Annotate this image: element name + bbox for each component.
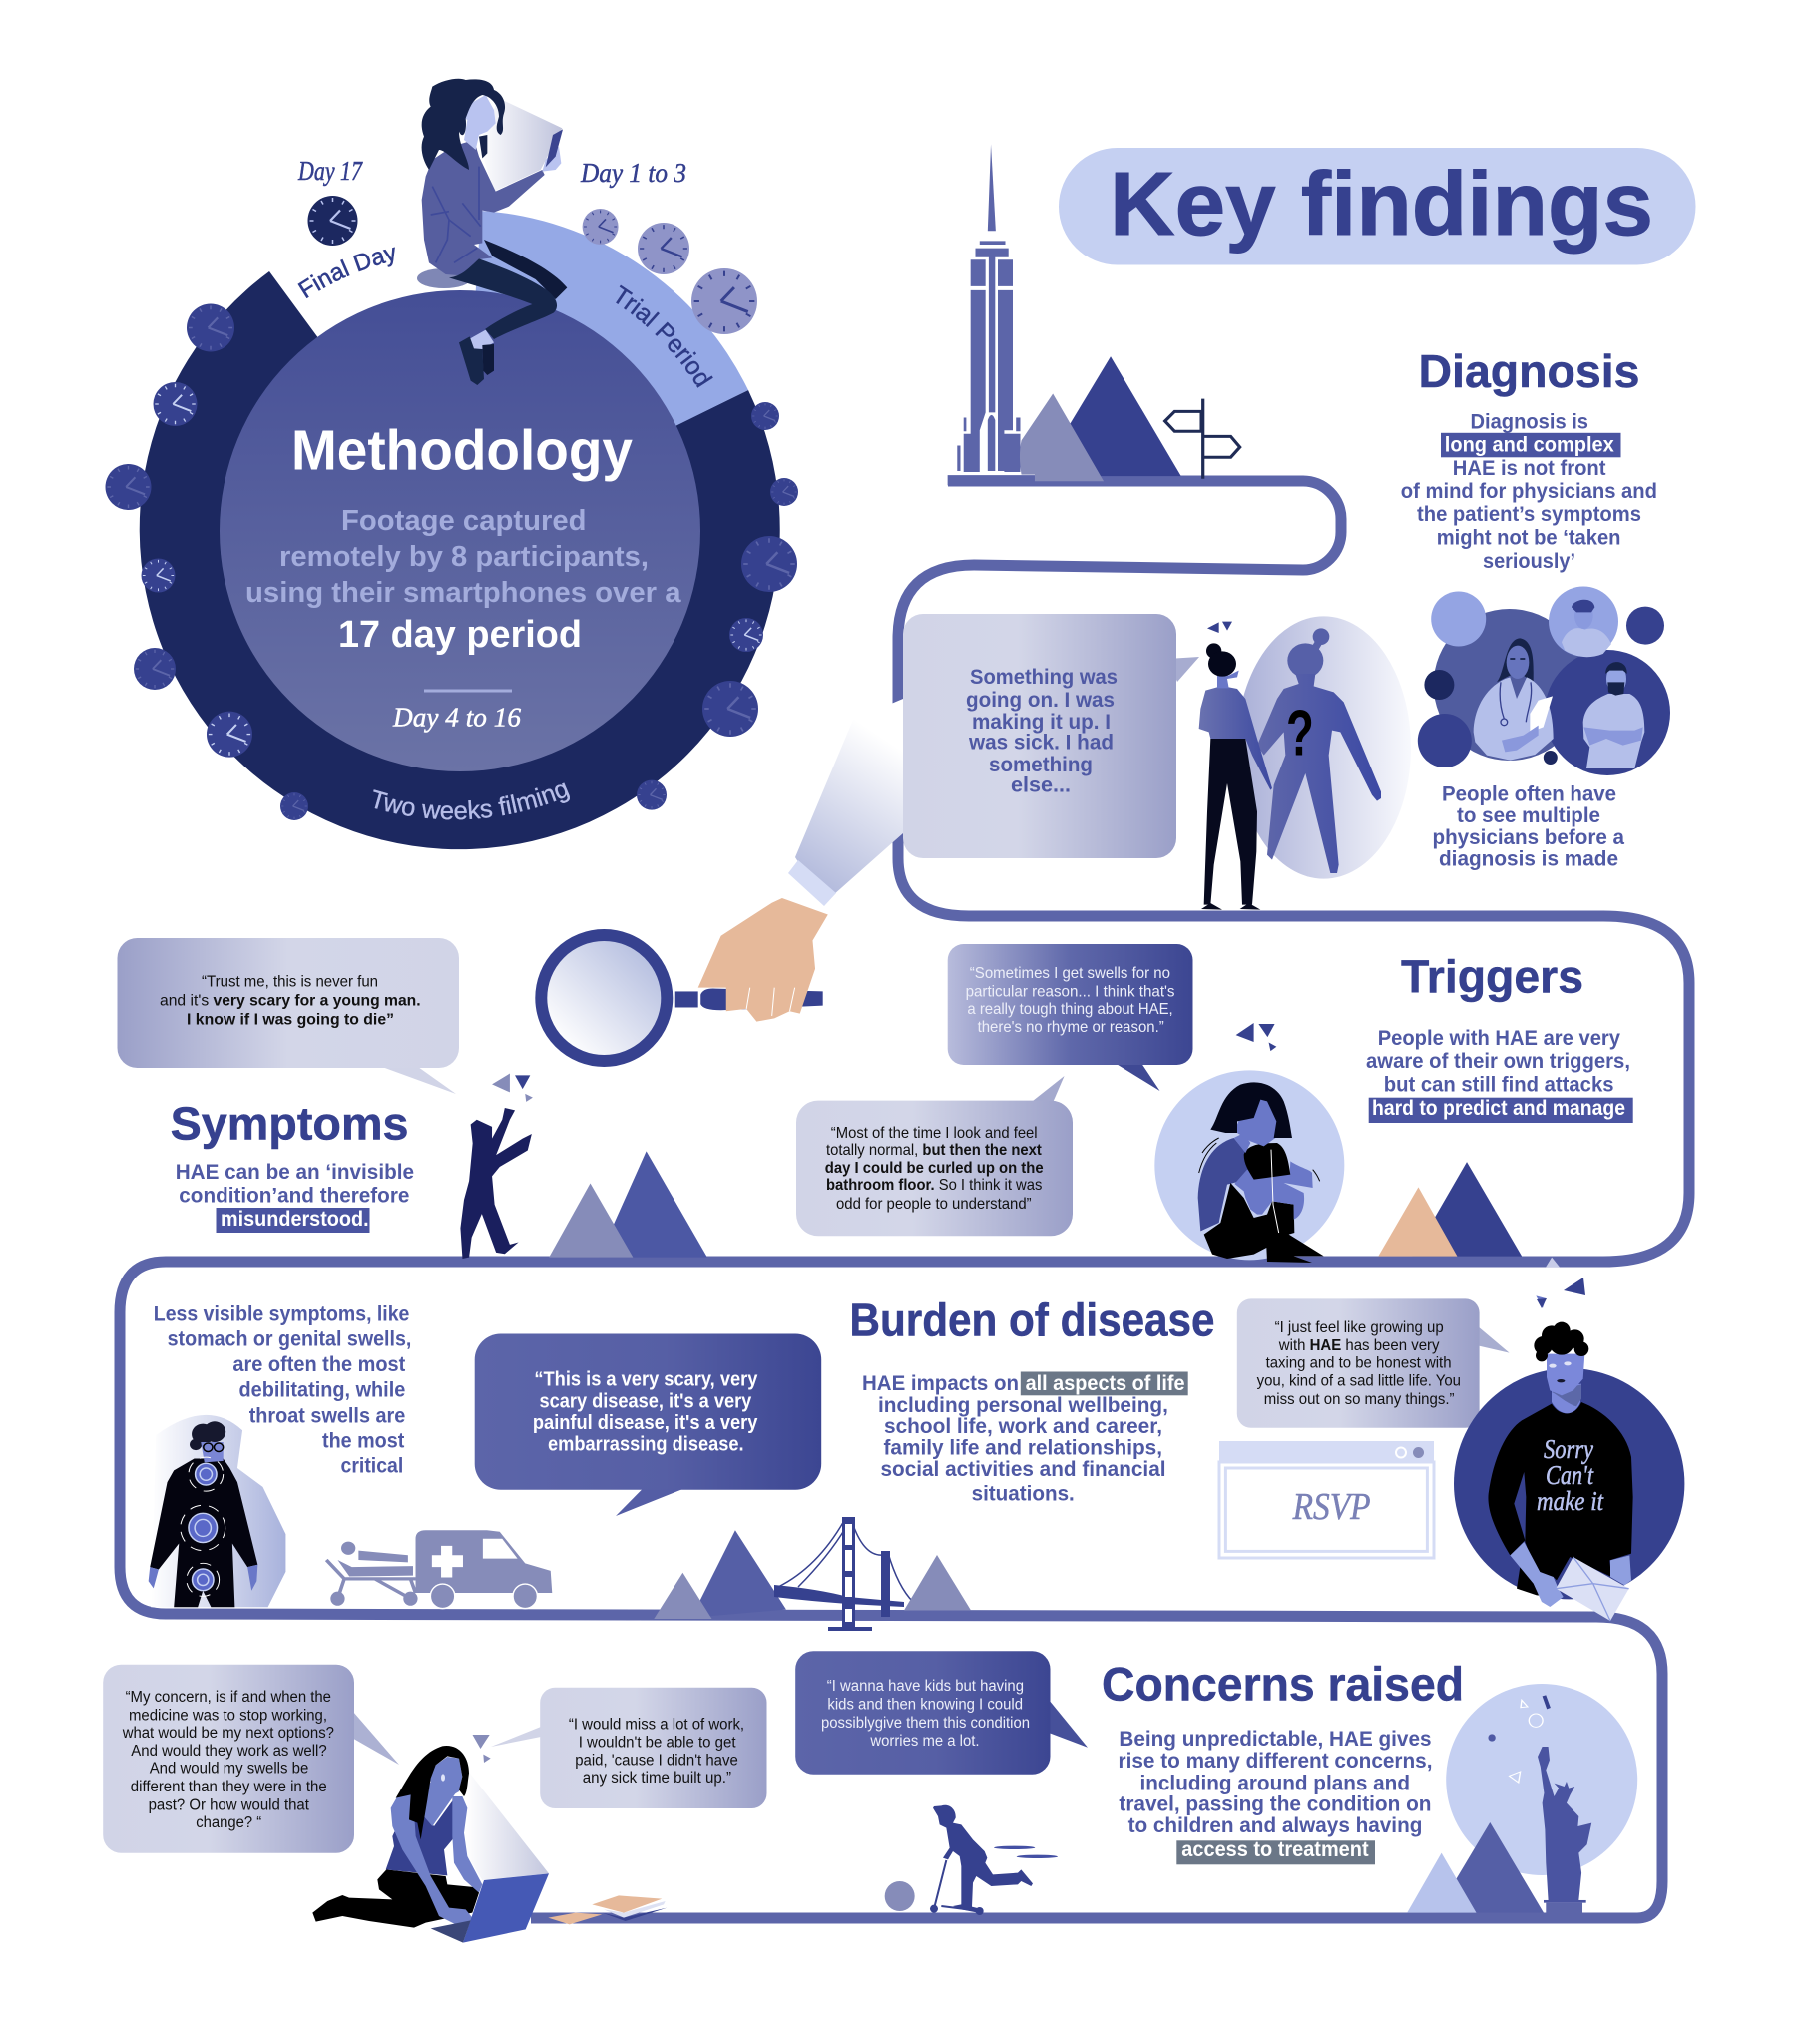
text: invisible condition	[176, 1161, 414, 1233]
icon: RSVP window: RSVP	[1292, 1486, 1371, 1528]
illustration: woman and mirror silhouette: ?	[1286, 697, 1314, 769]
speech bubble: sometimes I get swells: there's no rhyme or reason.”	[978, 1019, 1164, 1036]
title pill: key findings: Key findings	[1110, 155, 1653, 255]
text: aware of triggers	[1366, 1027, 1633, 1123]
speech bubble: most of the time	[796, 1076, 1073, 1236]
speech bubble: something was going on: was sick. I had	[968, 732, 1114, 755]
speech bubble: trust me	[118, 938, 459, 1094]
text: diagnosis description: Diagnosis is	[1471, 411, 1588, 434]
text: less visible symptoms: Less visible symptoms, like	[154, 1302, 409, 1325]
illustration: man reaching and mountains	[460, 1074, 707, 1259]
text: aware of triggers: aware of their own triggers,	[1366, 1050, 1630, 1073]
text: less visible symptoms: throat swells are	[249, 1404, 405, 1427]
illustration: physicians in circles	[1418, 587, 1670, 775]
icon: triangles near crying woman	[473, 1735, 489, 1749]
panel: methodology	[106, 78, 798, 850]
inner circle	[220, 290, 700, 771]
illustration: crying woman on laptop	[312, 1735, 667, 1943]
heading: symptoms: Symptoms	[171, 1098, 409, 1150]
speech bubble: wanna have kids: possiblygive them this condition	[821, 1715, 1030, 1732]
clocks: filming days	[106, 303, 798, 820]
heading: triggers: Triggers	[1401, 950, 1583, 1002]
speech bubble: growing up with HAE: with HAE has been very	[1278, 1337, 1440, 1354]
speech bubble: miss a lot of work	[491, 1688, 766, 1808]
winding road	[120, 481, 1689, 1918]
speech bubble: something was going on: making it up. I	[972, 711, 1111, 734]
text: invisible condition: misunderstood.	[221, 1208, 369, 1231]
text: multiple physicians: to see multiple	[1457, 804, 1600, 827]
speech bubble: most of the time: odd for people to understand”	[836, 1196, 1032, 1213]
description: 17 day period	[338, 614, 582, 656]
illustration: man with swells	[149, 1415, 285, 1607]
text: diagnosis description: of mind for physicians and	[1401, 480, 1657, 503]
speech bubble: very scary disease: scary disease, it's a very	[539, 1391, 752, 1413]
speech bubble: sometimes I get swells: “Sometimes I get swells for no	[970, 965, 1170, 982]
label: final day: Final Day	[297, 248, 395, 299]
text: multiple physicians: People often have	[1442, 783, 1616, 806]
speech bubble: something was going on: something	[989, 754, 1093, 776]
speech bubble: miss a lot of work: “I would miss a lot of work,	[569, 1716, 744, 1733]
text: diagnosis description: HAE is not front	[1453, 457, 1606, 480]
speech bubble: sometimes I get swells: a really tough thing about HAE,	[967, 1001, 1173, 1018]
text: multiple physicians: physicians before a	[1433, 826, 1624, 849]
text: diagnosis description	[1401, 411, 1657, 573]
speech bubble: most of the time: “Most of the time I look and feel	[831, 1125, 1038, 1142]
speech bubble: growing up with HAE	[1237, 1298, 1510, 1428]
text: invisible condition: HAE can be an ‘invisible	[176, 1161, 414, 1184]
speech bubble: growing up with HAE: miss out on so many things.”	[1264, 1391, 1455, 1408]
text: unpredictable concerns: including around plans and	[1139, 1772, 1410, 1794]
speech bubble: very scary disease	[475, 1333, 821, 1516]
illustration: skyscraper, mountains and signpost	[948, 144, 1240, 485]
speech bubble: trust me: I know if I was going to die”	[187, 1012, 394, 1028]
illustration: statue of liberty	[1407, 1684, 1637, 1913]
speech bubble: my concern	[103, 1665, 399, 1853]
speech bubble: miss a lot of work: I wouldn't be able to get	[579, 1734, 736, 1751]
text: diagnosis description: might not be ‘taken	[1437, 527, 1620, 549]
speech bubble: very scary disease: “This is a very scary, very	[534, 1368, 758, 1390]
text: all aspects of life: school life, work and career,	[884, 1415, 1162, 1438]
speech bubble: very scary disease: embarrassing disease.	[548, 1434, 744, 1456]
text: sorry can't make it: make it	[1537, 1486, 1604, 1516]
text: all aspects of life: HAE impacts on	[862, 1372, 1019, 1395]
speech bubble: trust me: “Trust me, this is never fun	[202, 974, 378, 991]
speech bubble: my concern: change? “	[196, 1814, 261, 1831]
heading: concerns raised: Concerns raised	[1102, 1657, 1464, 1710]
speech bubble: my concern: And would they work as well?	[131, 1743, 327, 1760]
heading: burden of disease: Burden of disease	[850, 1294, 1215, 1346]
speech bubble: my concern: different than they were in the	[131, 1779, 327, 1795]
icon: RSVP window	[1219, 1441, 1434, 1558]
speech bubble: very scary disease: painful disease, it's a very	[533, 1412, 758, 1434]
text: less visible symptoms: critical	[341, 1454, 403, 1477]
panel: triggers	[796, 944, 1633, 1267]
speech bubble: something was going on: else...	[1011, 774, 1071, 796]
speech bubble: miss a lot of work: paid, 'cause I didn't have	[575, 1752, 738, 1769]
text: sorry can't make it: Can't	[1546, 1460, 1594, 1490]
panel: concerns raised	[103, 1651, 1637, 1943]
speech bubble: my concern: what would be my next options?	[122, 1725, 334, 1742]
label: day 1 to 3: Day 1 to 3	[580, 158, 686, 188]
speech bubble: my concern: And would my swells be	[150, 1761, 308, 1778]
label: two weeks filming: Two weeks filming	[373, 782, 570, 820]
text: multiple physicians: diagnosis is made	[1439, 847, 1618, 870]
speech bubble: my concern: past? Or how would that	[149, 1796, 310, 1813]
text: unpredictable concerns: to children and always having	[1128, 1814, 1422, 1837]
speech bubble: wanna have kids	[795, 1651, 1088, 1775]
text: less visible symptoms	[154, 1302, 411, 1477]
ring: two weeks filming	[140, 271, 780, 849]
speech bubble: wanna have kids: worries me a lot.	[869, 1733, 980, 1750]
illustration: woman filming on phone	[422, 79, 567, 385]
label: trial period: Trial Period	[616, 285, 713, 388]
text: invisible condition: condition’and therefore	[179, 1184, 409, 1207]
speech bubble: trust me: and it's very scary for a young man.	[160, 993, 421, 1010]
text: aware of triggers: but can still find attacks	[1384, 1073, 1614, 1096]
speech bubble: something was going on	[903, 614, 1199, 858]
speech bubble: wanna have kids: “I wanna have kids but having	[827, 1678, 1024, 1695]
text: unpredictable concerns	[1118, 1728, 1433, 1864]
speech bubble: my concern: medicine was to stop working,	[129, 1707, 327, 1724]
speech bubble: wanna have kids: kids and then knowing I could	[827, 1697, 1023, 1714]
description: Footage captured	[341, 505, 587, 537]
icon: ambulance and stretcher	[326, 1530, 552, 1609]
text: diagnosis description: long and complex	[1445, 434, 1614, 457]
text: all aspects of life: situations.	[972, 1483, 1075, 1505]
panel: burden of disease	[149, 1278, 1684, 1631]
text: all aspects of life: all aspects of life	[1026, 1372, 1185, 1395]
text: less visible symptoms: stomach or genital swells,	[168, 1327, 411, 1350]
label: day 17: Day 17	[297, 156, 363, 186]
illustration: boy on scooter and ball	[885, 1805, 1058, 1915]
description: remotely by 8 participants,	[279, 541, 649, 573]
icon: triangles	[1537, 1278, 1585, 1308]
illustration: triangles and mountains	[1236, 1023, 1560, 1267]
text: all aspects of life: including personal wellbeing,	[878, 1394, 1168, 1417]
panel: diagnosis	[903, 345, 1670, 910]
text: unpredictable concerns: access to treatment	[1181, 1838, 1369, 1861]
speech bubble: growing up with HAE: taxing and to be honest with	[1266, 1355, 1451, 1372]
heading: diagnosis: Diagnosis	[1419, 345, 1640, 397]
text: less visible symptoms: the most	[322, 1430, 404, 1453]
illustration: hand holding magnifying glass	[541, 699, 903, 1061]
illustration: man with invitation	[1454, 1278, 1684, 1621]
text: less visible symptoms: are often the most	[232, 1353, 405, 1376]
illustration: mountains and bridge	[654, 1517, 971, 1631]
text: less visible symptoms: debilitating, while	[239, 1378, 405, 1401]
speech bubble: sometimes I get swells	[948, 944, 1193, 1091]
label: day 4 to 16: Day 4 to 16	[392, 703, 522, 733]
text: diagnosis description: the patient’s symptoms	[1417, 503, 1641, 526]
panel: symptoms	[118, 938, 707, 1259]
seat shadow	[417, 268, 471, 288]
ring: trial period	[460, 211, 748, 530]
text: diagnosis description: seriously’	[1483, 550, 1575, 573]
clocks: trial period	[583, 209, 757, 334]
clocks: day 17	[307, 196, 357, 246]
speech bubble: something was going on: Something was	[970, 666, 1118, 689]
speech bubble: most of the time: totally normal, but then the next	[826, 1142, 1042, 1159]
speech bubble: growing up with HAE: “I just feel like growing up	[1275, 1319, 1444, 1336]
text: aware of triggers: People with HAE are very	[1378, 1027, 1620, 1050]
text: multiple physicians	[1433, 783, 1624, 870]
speech bubble: miss a lot of work: any sick time built up.”	[583, 1770, 731, 1787]
text: unpredictable concerns: Being unpredictable, HAE gives	[1119, 1728, 1431, 1751]
text: unpredictable concerns: travel, passing the condition on	[1119, 1792, 1431, 1815]
speech bubble: sometimes I get swells: particular reason... I think that's	[966, 983, 1175, 1000]
speech bubble: something was going on: going on. I was	[966, 689, 1115, 712]
text: unpredictable concerns: rise to many different concerns,	[1118, 1750, 1433, 1773]
speech bubble: growing up with HAE: you, kind of a sad little life. You	[1257, 1373, 1461, 1390]
text: sorry can't make it: Sorry	[1544, 1434, 1593, 1464]
text: sorry can't make it	[1537, 1434, 1604, 1516]
description	[245, 505, 681, 656]
text: all aspects of life: social activities and financial	[880, 1458, 1165, 1481]
title: methodology: Methodology	[291, 419, 633, 483]
text: all aspects of life	[862, 1371, 1188, 1505]
illustration: girl hugging knees	[1154, 1070, 1344, 1263]
description: using their smartphones over a	[245, 577, 681, 609]
speech bubble: most of the time: bathroom floor. So I think it was	[826, 1177, 1042, 1194]
speech bubble: my concern: “My concern, is if and when the	[126, 1689, 331, 1706]
text: all aspects of life: family life and relationships,	[884, 1436, 1162, 1459]
illustration: woman and mirror silhouette	[1199, 616, 1411, 910]
speech bubble: most of the time: day I could be curled up on the	[825, 1160, 1044, 1177]
text: aware of triggers: hard to predict and manage	[1372, 1097, 1625, 1120]
